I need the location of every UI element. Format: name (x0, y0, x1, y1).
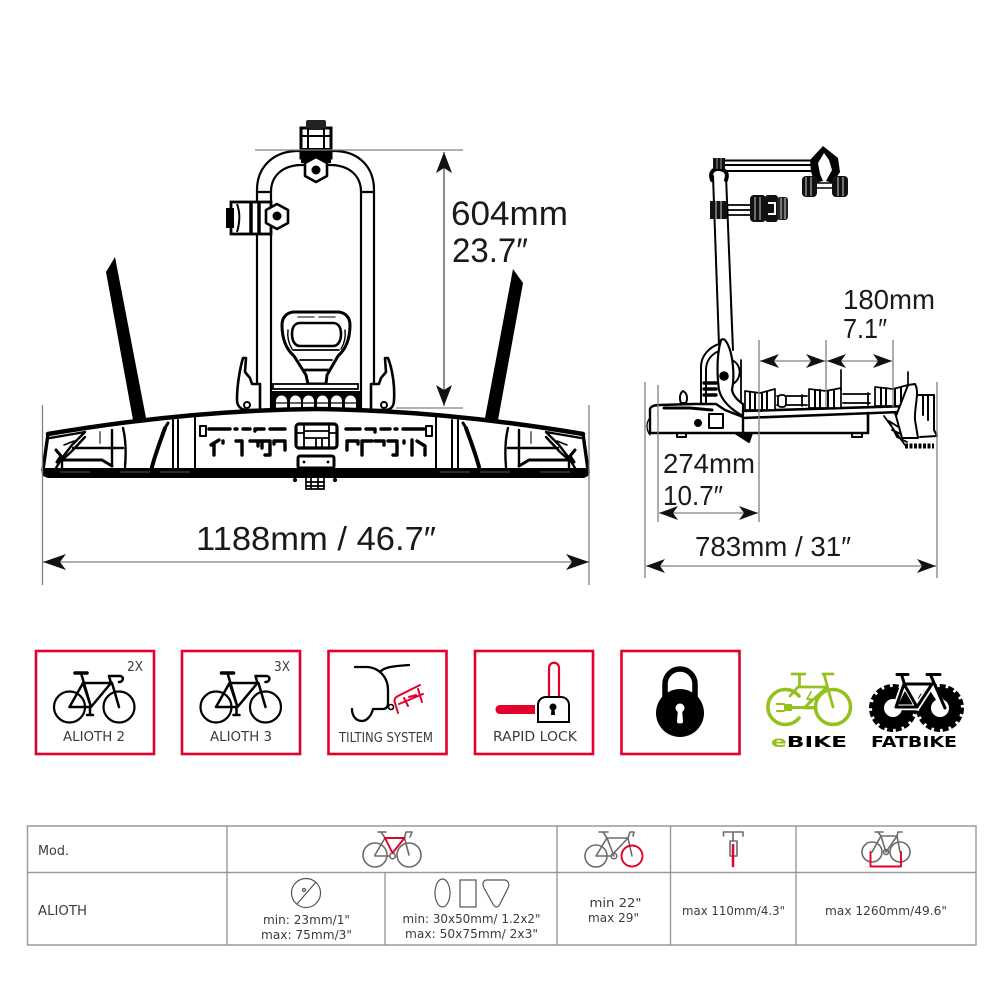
front view: right wing post (485, 269, 523, 420)
dimension lines: front view (42, 150, 589, 585)
side view: cradle 2 (809, 370, 841, 408)
arrowheads: 180mm (760, 354, 892, 368)
front view: lower center plate (298, 456, 334, 468)
text: fatbike: FATBIKE (871, 733, 957, 751)
icon: bike wheel highlighted (585, 832, 642, 867)
front view: main base body (42, 409, 589, 478)
front view diagram of bike carrier (42, 120, 590, 489)
text: profile max: max: 50x75mm/ 2x3" (405, 926, 538, 941)
icon: bike (200, 673, 281, 722)
front view: hoop frame (257, 151, 374, 408)
feature box: Alioth 2 (36, 651, 154, 754)
front view: right latch (371, 358, 394, 410)
front view: bottom bar (42, 468, 590, 478)
front view: left wing post (106, 257, 146, 420)
arrowheads: height (436, 152, 452, 406)
text: rapid lock: RAPID LOCK (493, 730, 577, 745)
label: 10.7 inches: 10.7″ (663, 480, 723, 511)
icon: rapid lock (496, 663, 569, 722)
side view: lower arm and clamp (710, 195, 788, 222)
side view: trellis (884, 414, 934, 446)
table grid (28, 826, 976, 945)
label: 7.1 inches: 7.1″ (843, 313, 887, 344)
label: 180mm: 180mm (843, 284, 935, 315)
text: tube max: max: 75mm/3" (261, 927, 352, 942)
specifications table (28, 826, 976, 945)
front view: under hitch (294, 478, 336, 489)
side view: cradle 3 (875, 372, 908, 406)
text: profile min: min: 30x50mm/ 1.2x2" (402, 911, 540, 926)
text: tilting system: TILTING SYSTEM (338, 731, 433, 746)
feature box: tilting system (328, 651, 446, 754)
text: Alioth: ALIOTH (38, 904, 87, 919)
text: wheelbase max: max 1260mm/49.6" (825, 903, 947, 918)
icon: bike frame highlighted (363, 832, 421, 867)
text: tube min: min: 23mm/1" (263, 912, 350, 927)
icon: padlock (656, 669, 704, 737)
side view: tail section (896, 384, 937, 438)
label: total width: 1188mm / 46.7″ (196, 520, 436, 557)
arrowheads: width (43, 554, 589, 570)
label: 274mm: 274mm (663, 448, 755, 479)
side view: cradle 1 (745, 389, 775, 410)
icon: tube profile shapes (435, 879, 509, 907)
arrowheads: 783mm (646, 559, 936, 573)
front view: center plate markings (200, 426, 432, 455)
side view: pivot assembly (701, 339, 743, 416)
text: Mod: Mod. (38, 844, 69, 859)
side view diagram of bike carrier (647, 146, 937, 446)
icon: ebike (768, 674, 850, 724)
side view: rail (743, 406, 908, 433)
text: wheel min: min 22" (590, 895, 642, 910)
label: side length: 783mm / 31″ (695, 531, 851, 562)
front view: crossbars and bumps (272, 384, 360, 410)
icon: tilting hitch (352, 665, 423, 721)
text: Alioth 2: ALIOTH 2 (63, 730, 125, 745)
side view: arm between cradles 2 (843, 393, 870, 405)
text: 3X: 3X (274, 660, 290, 675)
side view: base unit (647, 391, 862, 442)
text: Alioth 3: ALIOTH 3 (210, 730, 272, 745)
front view: top clamp (301, 120, 331, 182)
feature box: Alioth 3 (182, 651, 300, 754)
text: ebike: e BIKE (771, 733, 847, 751)
side view: top arm (713, 158, 811, 171)
icon: tyre width (724, 832, 743, 866)
feature box: rapid lock (475, 651, 593, 754)
front view: side clamp (226, 202, 288, 234)
front view: right light cluster (505, 428, 581, 468)
side view: post (711, 169, 733, 350)
icon: fatbike (871, 674, 962, 730)
side view: top cradle claw (802, 146, 848, 197)
text: tyre max: max 110mm/4.3" (682, 903, 785, 918)
fatbike logo (871, 674, 962, 751)
icon: tube diameter circle (292, 878, 320, 908)
front view: handle (282, 312, 350, 384)
dimension lines: side view (645, 340, 937, 578)
icon: bike (54, 673, 134, 722)
icon: wheelbase (862, 832, 910, 866)
front view: left latch (237, 358, 260, 410)
ebike logo (768, 674, 850, 751)
label: height inches: 23.7″ (452, 232, 528, 270)
side view: arm between cradles 1 (777, 395, 807, 407)
text: wheel max: max 29" (588, 910, 639, 925)
label: height 604mm: 604mm (451, 195, 568, 233)
feature box: padlock (622, 651, 740, 754)
front view: center display (296, 424, 337, 448)
text: 2X: 2X (127, 660, 143, 675)
front view: left light cluster (50, 428, 126, 468)
arrowheads: 274mm (659, 506, 758, 520)
